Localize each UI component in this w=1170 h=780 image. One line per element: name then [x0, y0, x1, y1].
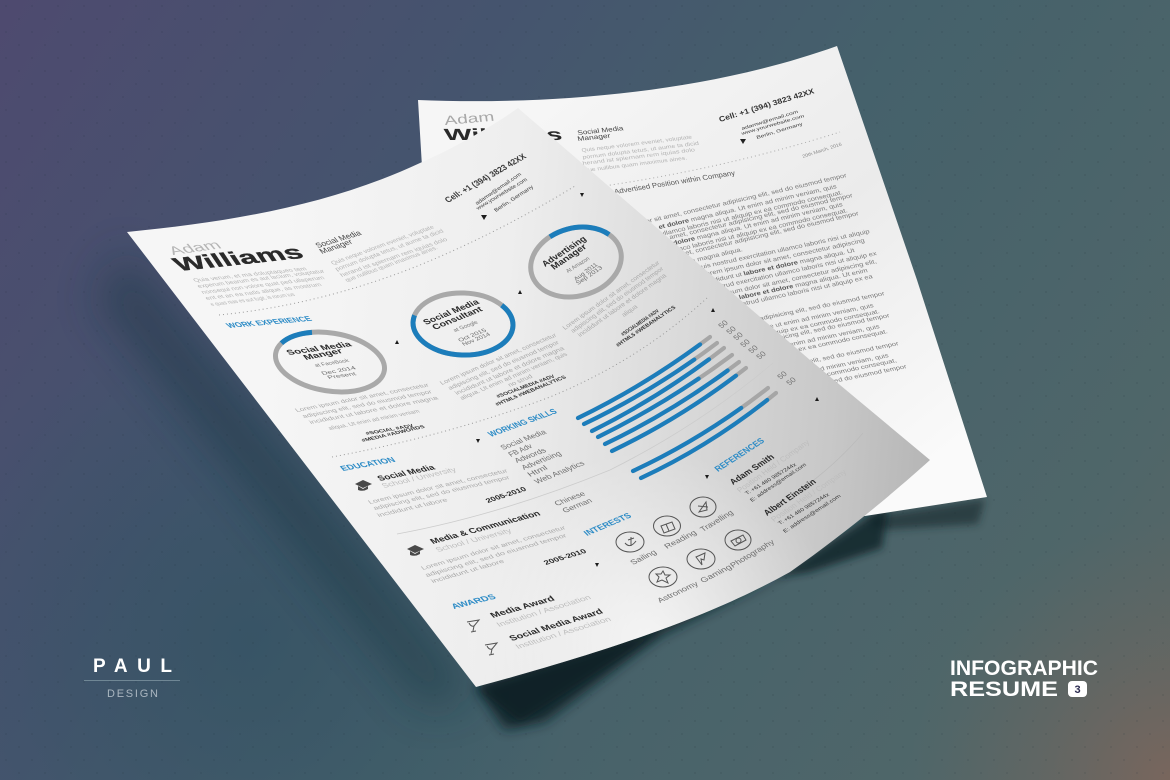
- back sheet name: Williams: [443, 125, 564, 144]
- heading: awards: AWARDS: [449, 592, 498, 610]
- name heading: [165, 239, 308, 275]
- interest labels: Sailing: [628, 548, 659, 566]
- back sheet contact block: www.yourwebsite.com: [741, 114, 805, 137]
- reference 2: Position Held / Company: [769, 468, 848, 523]
- ring: social media consultant: Consultant: [430, 305, 485, 331]
- back sheet name: [443, 109, 564, 144]
- reference 1: Adam Smith: [727, 452, 776, 486]
- ring: advertising manager: Manager: [548, 242, 589, 271]
- education entry 2: [407, 509, 588, 584]
- skill values: 50: [775, 369, 789, 381]
- section marker dots: [395, 193, 819, 567]
- education entry 1: School / University: [380, 466, 458, 490]
- education entry 1: 2005-2010: [483, 485, 528, 504]
- skill values: 50: [731, 330, 745, 342]
- back sheet intro paragraph: que nullibus quam imaximus aines.: [584, 156, 688, 174]
- intro paragraph right: [330, 224, 450, 283]
- ring: social media consultant: at Google: [452, 320, 480, 333]
- skill labels: German: [560, 497, 594, 514]
- reference 2: E: address@email.com: [782, 493, 843, 534]
- back sheet body text: incididunt ut labore et dolore magna aliqua. Ut enim ad minim veniam, quis: [600, 202, 844, 264]
- job description 3: aliqua: [620, 304, 640, 318]
- back sheet intro paragraph: [581, 135, 700, 174]
- contact block: Cell: +1 (394) 3823 42XX: [442, 152, 528, 204]
- back sheet body text: adipisicing elit, sed do eiusmod tempor: [764, 313, 891, 344]
- job description 3: adipiscing elit, sed do eiusmod tempor: [569, 265, 666, 334]
- intro paragraph left: ent et an ea natis alique, as mostrum: [204, 282, 323, 302]
- back sheet paper: [418, 46, 987, 516]
- skill values: 50: [738, 337, 752, 349]
- front sheet content: [165, 152, 863, 655]
- education entry 2: Lorem ipsum dolor sit amet, consectetur: [420, 525, 569, 571]
- back sheet body text: ex ea commodo consequat,: [806, 358, 898, 382]
- skill labels: [498, 428, 594, 514]
- award entries: Institution / Association: [494, 593, 593, 628]
- interest labels: Photography: [728, 538, 776, 569]
- skill values: 50: [784, 375, 798, 387]
- job description 2: Lorem ipsum dolor sit amet, consectetur: [439, 332, 559, 386]
- hashtags 1: #MEDIA #ADWORDS: [360, 425, 427, 443]
- heading: working skills: WORKING SKILLS: [486, 407, 559, 438]
- skill labels: Adwords: [512, 446, 548, 464]
- ring: advertising manager: Advertising: [539, 234, 588, 268]
- award entries: [467, 593, 613, 655]
- logo: Paul Design: [84, 656, 180, 700]
- back sheet body text: sed do eiusmod tempor: [830, 364, 908, 385]
- back sheet body text: aliquip ex ea commodo consequat.: [774, 329, 889, 358]
- back sheet content: [443, 87, 908, 385]
- job description 1: adipiscing elit, sed do eiusmod tempor: [301, 389, 435, 419]
- reference 1: E: address@email.com: [749, 462, 809, 503]
- back sheet job title: Manager: [576, 131, 612, 143]
- back sheet body text: incididunt ut labore et dolore magna aliqua.: [604, 247, 744, 284]
- interest labels: Reading: [662, 529, 699, 550]
- ring: social media consultant: Nov 2014: [461, 332, 493, 347]
- job description 2: aliqua. Ut enim ad minim veniam, quis: [459, 351, 569, 401]
- education entry 2: School / University: [433, 527, 514, 553]
- education entry 1: Lorem ipsum dolor sit amet, consectetur: [367, 468, 511, 506]
- heading: education: EDUCATION: [338, 456, 397, 473]
- job title: Social Media: [313, 228, 364, 250]
- education entry 2: incididunt ut labore: [430, 558, 507, 584]
- education entry 2: adipiscing elit, sed do eiusmod tempor: [424, 533, 570, 578]
- back sheet name: Adam: [443, 109, 495, 128]
- hashtags 3: #HTML5 #WEBANALYTICS: [615, 305, 678, 348]
- back sheet body text: [592, 173, 908, 385]
- job title: Manager: [317, 237, 355, 256]
- hashtags 1: #SOCIAL #ADV: [364, 424, 416, 436]
- front sheet paper: [127, 108, 930, 687]
- back sheet body text: ad minim veniam, quis nostrud ullamco laboris nisi ut aliquip ex ea: [660, 274, 874, 325]
- badge: Infographic Resume 3: [950, 657, 1098, 701]
- ring: advertising manager: [523, 217, 629, 307]
- back sheet body text: incididunt ut labore et dolore magna aliqua. Ut enim ad minim veniam, quis: [594, 184, 838, 246]
- back sheet intro paragraph: Quis neque volorem eveniet, voluptate: [581, 135, 693, 154]
- back sheet job title: [576, 124, 625, 143]
- back sheet intro paragraph: pornum dolupta tetus, ut aume ta dicid: [582, 141, 700, 161]
- heading: references: REFERENCES: [712, 436, 766, 473]
- panel: front sheet (resume): [127, 108, 930, 687]
- intro paragraph left: nonsequi non volore quat ped ullaperum: [200, 275, 326, 296]
- job description 3: Lorem ipsum dolor sit amet, consectetur: [561, 259, 662, 331]
- education entry 1: incididunt ut labore: [376, 497, 450, 519]
- skill labels: FB Adv: [506, 442, 534, 458]
- contact block: adamw@email.com: [474, 172, 524, 206]
- back sheet job title: Social Media: [576, 124, 625, 137]
- education entry 1: [355, 463, 528, 519]
- ring: advertising manager: Sep 2013: [575, 265, 605, 286]
- panel: back sheet (cover letter): [418, 46, 987, 516]
- job description 2: no strud: [507, 373, 535, 388]
- back sheet body text: nisi ut aliquip ex ea commodo consequat.: [745, 309, 881, 342]
- interest labels: [628, 509, 776, 604]
- ring: social media manager: Social Media: [284, 340, 354, 357]
- back sheet body text: ut enim ad minim veniam, quis: [790, 353, 890, 379]
- skill labels: Html: [525, 464, 550, 478]
- back sheet body text: elit, sed do eiusmod tempor: [808, 341, 900, 365]
- hashtags 2: #SOCIALMEDIA #ADV: [495, 374, 557, 399]
- ring: social media consultant: Oct 2015: [457, 328, 489, 343]
- heading: work experience: WORK EXPERIENCE: [224, 315, 314, 330]
- award entries: Media Award: [488, 594, 557, 619]
- skill labels: Chinese: [552, 490, 588, 507]
- ring: social media manager: [271, 325, 389, 399]
- back sheet body text: nostrud exercitation ullamco laboris nisi ut aliquip ex ea commodo consequat.: [595, 190, 844, 253]
- contact block: Berlin, Germany: [493, 184, 535, 213]
- intro paragraph right: herand ist spiernam rem iquias dolo: [339, 237, 450, 278]
- hashtags 3: #SOCIALMEDIA #ADV: [620, 308, 661, 337]
- skill labels: Social Media: [498, 428, 549, 451]
- job description 2: adipiscing elit, sed do eiusmod tempor: [447, 339, 562, 391]
- award entries: Social Media Award: [507, 607, 605, 642]
- logo: Paul Design: PAUL: [93, 656, 172, 677]
- name heading: Williams: [168, 241, 308, 275]
- back sheet intro paragraph: herand ist spiernam rem iquias dolo: [582, 148, 696, 167]
- job description 3: incididunt ut labore et dolore magna: [576, 272, 669, 338]
- hashtags 2: #HTML5 #WEBANALYTICS: [494, 375, 568, 407]
- job description 2: incididunt ut labore et dolore magna: [454, 345, 567, 396]
- back sheet body text: labore et dolore ut enim ad minim veniam, quis: [722, 303, 875, 339]
- skill values: 50: [716, 318, 730, 330]
- back sheet body text: ea commodo Lorem ipsum dolor sit amet, consectetur adipiscing elit,: [656, 259, 878, 311]
- skill values: 50: [724, 324, 738, 336]
- job description 1: aliqua. Ut enim ad minim veniam: [327, 409, 422, 431]
- back sheet body text: sed do eiusmod tempor ut labore et dolore magna aliqua. Ut enim: [653, 268, 869, 319]
- skill labels: Advertising: [519, 450, 563, 471]
- interest labels: Travelling: [698, 509, 735, 533]
- back sheet body text: ex ea Lorem ipsum dolor sit amet, consectetur adipiscing: [681, 238, 866, 282]
- education entry 1: adipiscing elit, sed do eiusmod tempor: [372, 475, 513, 512]
- back sheet body text: consectetur adipisicing elit, sed do eiusmod tempor: [719, 291, 886, 330]
- skill bars: [578, 337, 776, 478]
- intro paragraph left: Quia verum, et ma doluptaqueo tem: [192, 266, 309, 284]
- back sheet body text: ut enim ad minim veniam, quis: [781, 324, 881, 350]
- job description 1: incididunt ut labore et dolore magna: [308, 395, 441, 425]
- job description 2: [439, 332, 569, 401]
- reference 1: Position Held / Company: [735, 438, 811, 494]
- interest labels: Gaming: [698, 563, 734, 584]
- back sheet subject: Advertised Position within Company: [613, 169, 736, 196]
- ring: advertising manager: Aug 2011: [573, 262, 599, 282]
- ring: social media consultant: Social Media: [421, 297, 481, 326]
- ring: social media consultant: [412, 291, 514, 357]
- skill values: 50: [746, 343, 760, 355]
- award entries: Institution / Association: [513, 615, 613, 650]
- intro paragraph left: experum bearum es aut lacium, voluptatur: [196, 269, 327, 290]
- back sheet body text: Lorem ipsum dolor sit amet, consectetur adipisicing elit, sed do eiusmod tempor: [604, 211, 860, 275]
- reference 2: T: +61 480 9857244x: [777, 492, 831, 526]
- education entry 1: Social Media: [375, 463, 437, 483]
- back sheet date: 20th March, 2016: [802, 142, 843, 160]
- intro paragraph right: Quis neque volorem eveniet, voluptate: [330, 224, 436, 266]
- ring: social media manager: Dec 2014: [320, 366, 359, 377]
- badge: Infographic Resume 3: 3: [1074, 684, 1081, 696]
- badge: Infographic Resume 3: RESUME: [950, 678, 1058, 701]
- ring: social media manager: Manger: [301, 347, 345, 362]
- interest icons: [616, 497, 751, 587]
- back sheet body text: tempor incididunt ut labore et dolore magna aliqua. Ut: [678, 248, 856, 291]
- back sheet body text: Lorem ipsum dolor sit amet, consectetur adipisicing elit, sed do eiusmod tempor: [598, 193, 854, 257]
- back sheet contact block: adamw@email.com: [741, 109, 799, 132]
- back sheet contact block: Cell: +1 (394) 3823 42XX: [718, 87, 816, 124]
- heading: interests: INTERESTS: [581, 511, 634, 537]
- contact block: www.yourwebsite.com: [474, 177, 530, 212]
- back sheet body text: Lorem ipsum dolor sit amet, consectetur adipisicing elit, sed do eiusmod tempor: [592, 173, 848, 237]
- interest labels: Astronomy: [655, 580, 700, 604]
- education entry 2: 2005-2010: [541, 547, 588, 566]
- ring: social media manager: Present: [326, 372, 358, 381]
- back sheet body text: quis nostrud exercitation ullamco laboris nisi ut aliquip: [696, 229, 871, 271]
- back sheet body text: enim minim nostrud exercitation ullamco laboris nisi ut aliquip ex: [670, 251, 878, 300]
- shadows under the sheets: [95, 250, 985, 730]
- skill labels: Web Analytics: [532, 459, 587, 485]
- intro paragraph left: [192, 266, 327, 308]
- intro paragraph left: e quas nias es aut fugit, is rorum ius: [209, 292, 297, 308]
- name heading: Adam: [165, 239, 225, 258]
- education entry 2: Media & Communication: [428, 509, 542, 545]
- skill values: [716, 318, 798, 387]
- badge: Infographic Resume 3: INFOGRAPHIC: [950, 657, 1098, 680]
- ring: advertising manager: At Amazon: [565, 256, 591, 274]
- back sheet body text: nostrud exercitation ullamco laboris nisi ut aliquip ex ea commodo consequat.: [600, 208, 849, 271]
- intro paragraph right: pornum dolupta tetus, ut aume ta dicid: [334, 228, 446, 272]
- job description 1: [294, 382, 441, 431]
- back sheet contact block: [718, 87, 816, 144]
- ring: social media manager: at FaceBook: [313, 359, 351, 369]
- reference 1: T: +61 480 9857244x: [744, 462, 798, 496]
- reference 2: Albert Einstein: [761, 477, 818, 517]
- job description 1: Lorem ipsum dolor sit amet, consectetur: [294, 382, 432, 413]
- skill values: 50: [754, 349, 768, 361]
- logo: Paul Design: DESIGN: [107, 688, 158, 700]
- back sheet contact block: Berlin, Germany: [756, 121, 804, 141]
- intro paragraph right: que nullibus quam imaximus aines.: [344, 245, 440, 283]
